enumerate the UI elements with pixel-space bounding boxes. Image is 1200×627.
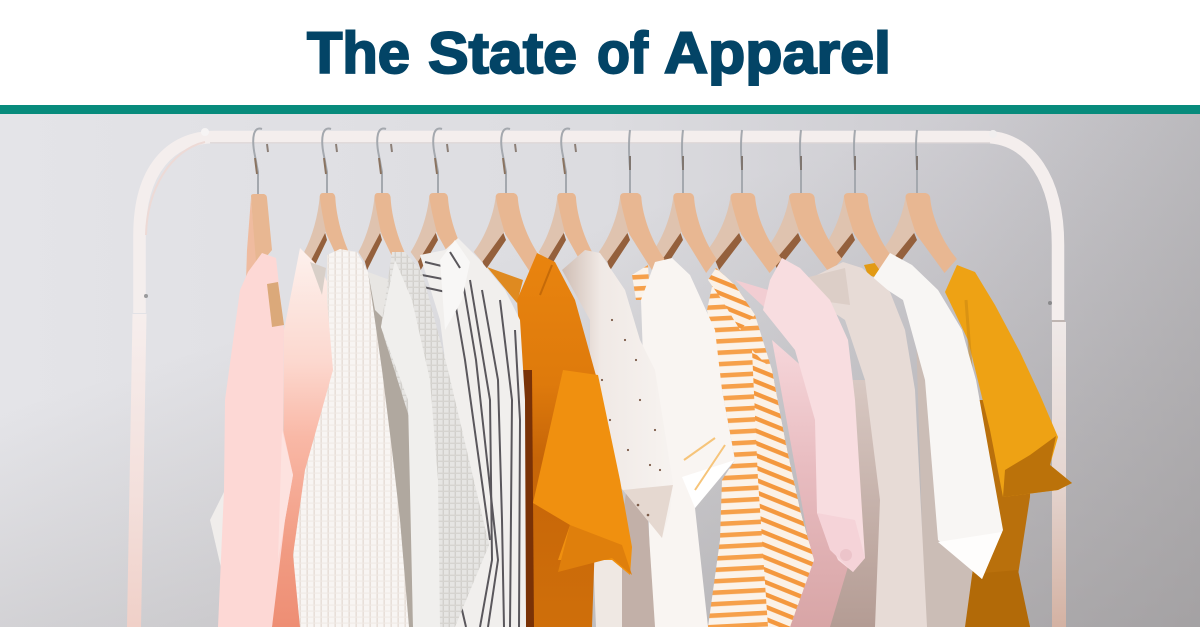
hanger 11 <box>820 193 894 273</box>
hanger 10 <box>764 193 842 273</box>
hanger 5 <box>474 193 542 273</box>
hooks <box>253 129 917 196</box>
title: Apparel <box>664 21 891 86</box>
title: The <box>307 21 410 86</box>
title: of <box>597 21 649 86</box>
garment: white knit sweater <box>293 249 409 627</box>
hanger 4 <box>411 193 468 273</box>
garment: white tee <box>872 253 1003 627</box>
hanger 9 <box>706 193 782 273</box>
garment: mustard dress <box>864 262 1072 627</box>
garment: grey waffle cardigan <box>368 252 489 627</box>
garment: beige tee <box>803 262 927 627</box>
garment: pale pink tank top <box>210 253 293 627</box>
garment: orange striped tee <box>707 268 814 627</box>
hanger 7 <box>599 193 664 273</box>
garment: black striped shirt <box>420 238 526 627</box>
garment: orange tee <box>487 253 632 627</box>
clothes rack <box>127 128 1066 627</box>
title <box>307 21 891 86</box>
teal divider bar <box>0 105 1200 114</box>
garment: white shirt <box>622 258 735 627</box>
hanger 2 <box>304 193 352 273</box>
hanger 6 <box>539 193 596 273</box>
hanger 12 <box>881 193 957 273</box>
garment: coral sweater back <box>272 248 340 627</box>
title: State <box>428 21 577 86</box>
hanger 8 <box>653 193 717 273</box>
garment: speckled white tee <box>562 250 673 627</box>
garment: pink tee <box>735 258 865 627</box>
hanger 3 <box>358 193 408 273</box>
hanger 1 <box>245 194 272 312</box>
white header band <box>0 0 1200 105</box>
